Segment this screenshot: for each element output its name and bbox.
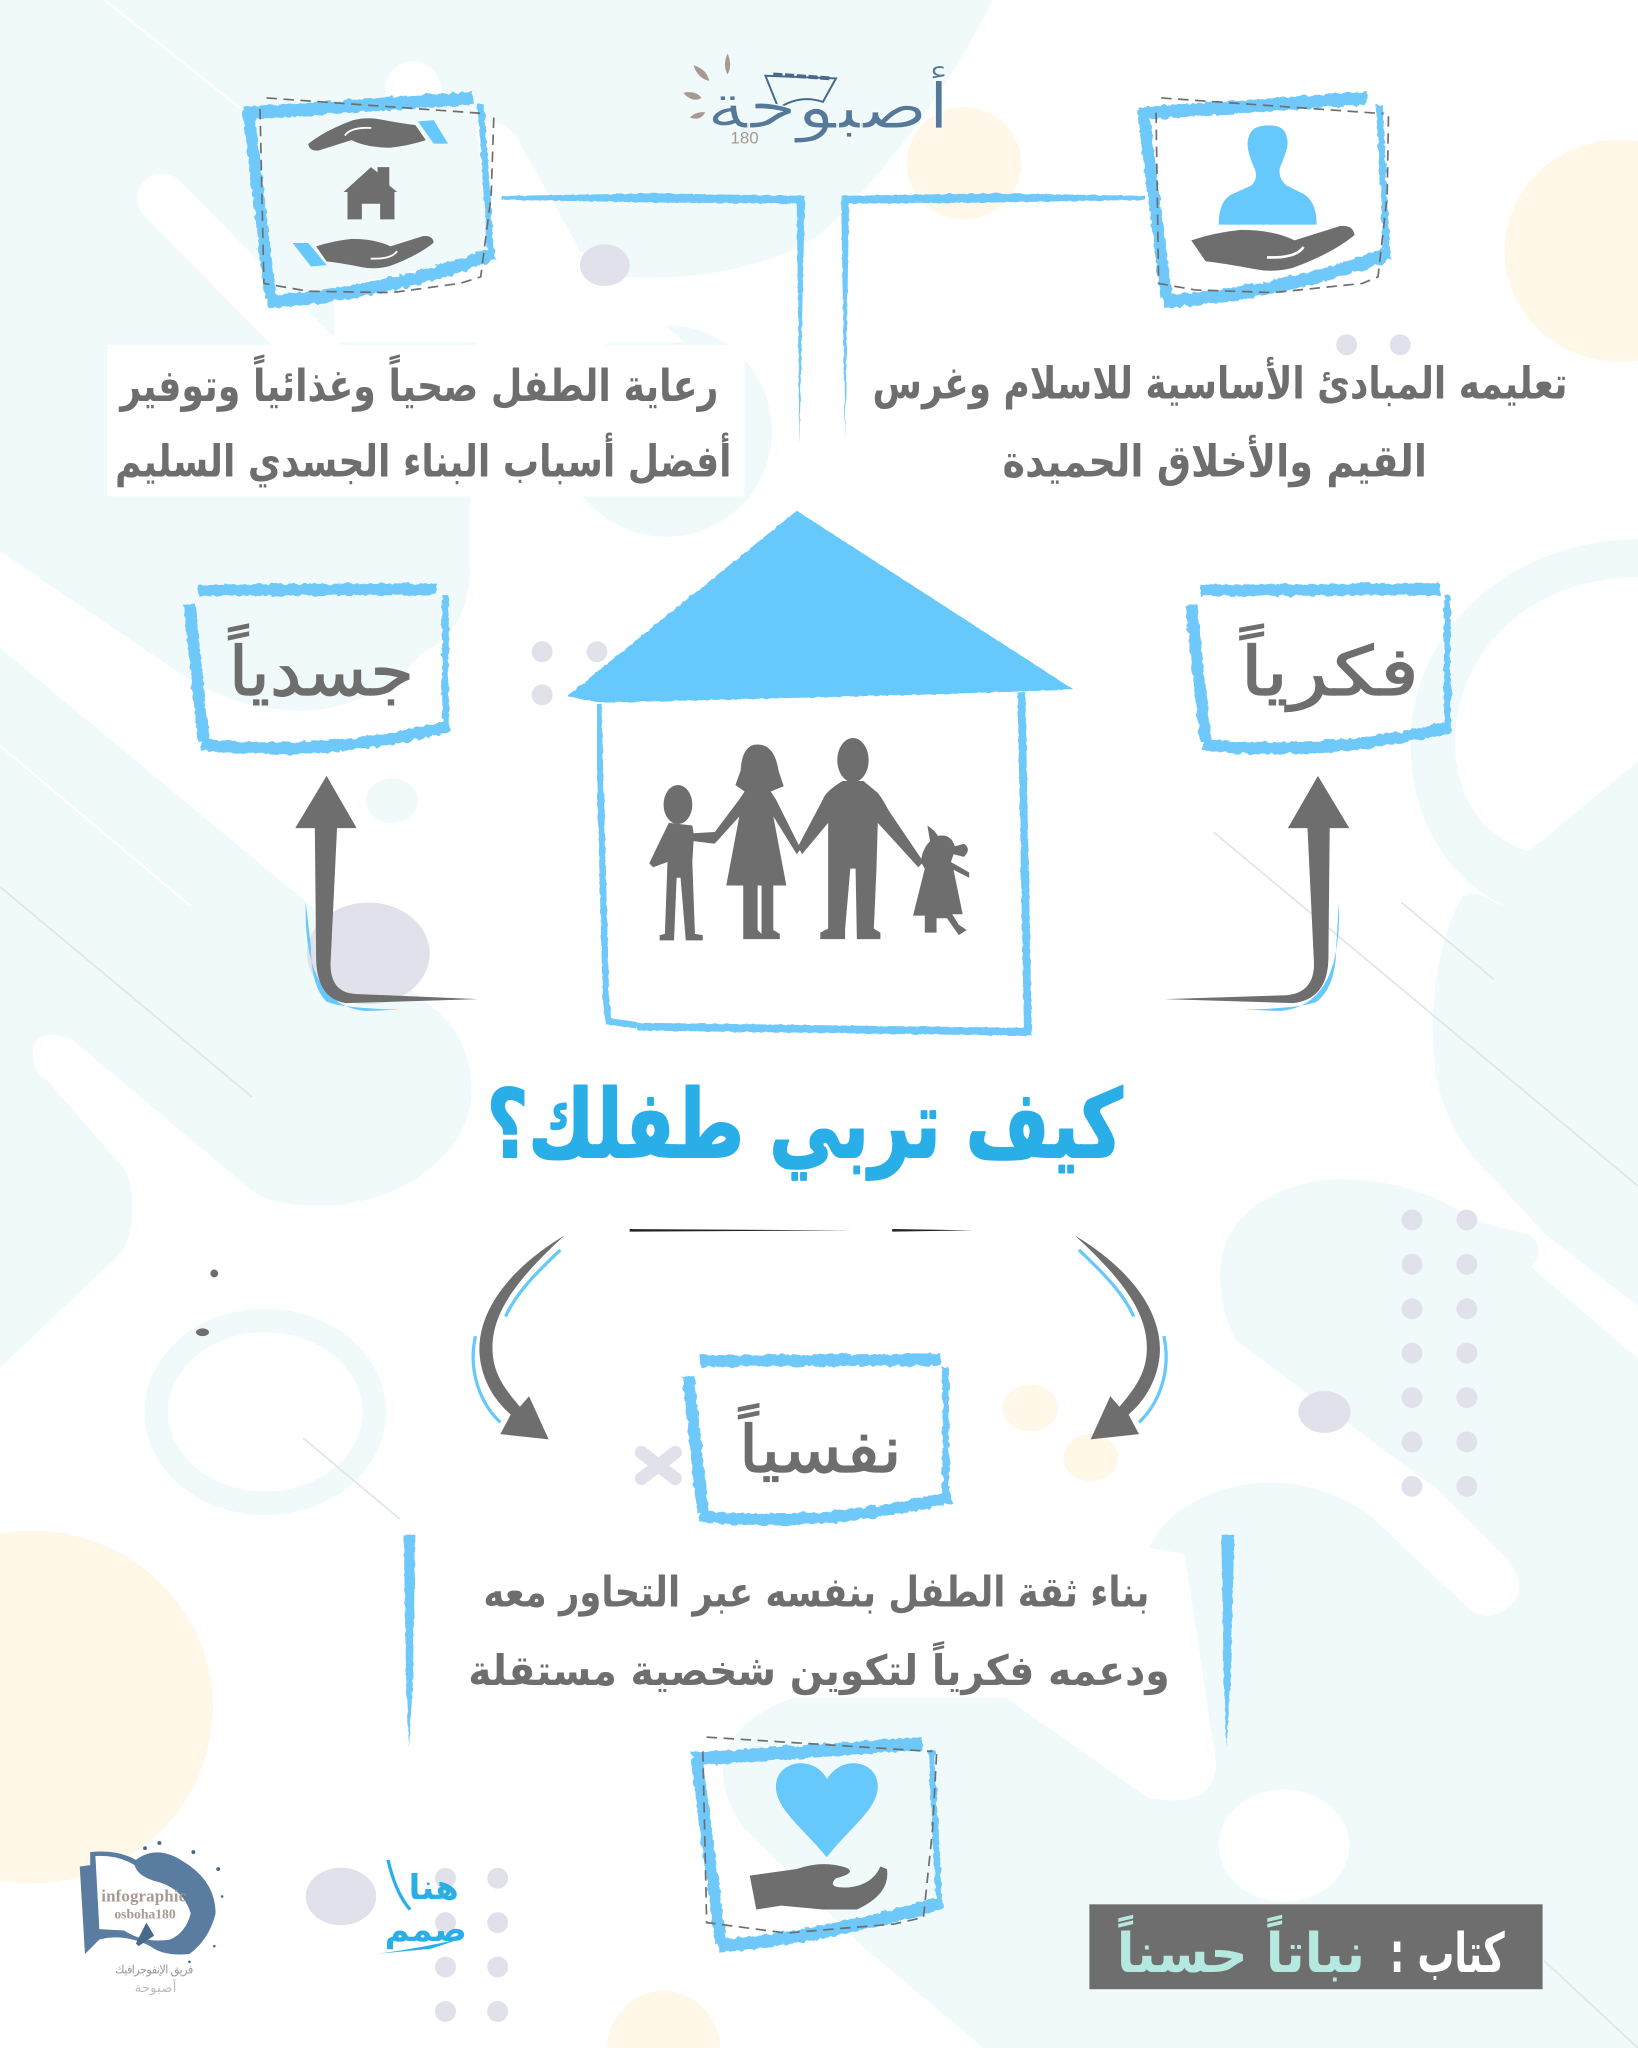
panel: emotionally label: نفسياً	[738, 1404, 902, 1488]
text block: physical description	[107, 345, 745, 496]
logo: Osboha 180: 180	[730, 129, 759, 148]
side bar right	[1221, 1535, 1234, 1748]
title underline	[630, 1229, 973, 1232]
arrow: house to intellectually	[1165, 776, 1349, 1011]
panel: intellectually label	[1191, 589, 1451, 748]
icon: house in hands	[293, 118, 448, 268]
title: كيف تربي طفلك؟	[487, 1071, 1123, 1180]
text block: intellectual description: القيم والأخلاق الحميدة	[1003, 434, 1427, 488]
connector: left frame to house	[502, 193, 805, 444]
arrow: house to physically	[295, 776, 478, 1011]
logo: designer signature	[376, 1860, 467, 1954]
connector: right frame to house	[841, 193, 1146, 438]
text block: emotional description: بناء ثقة الطفل بنفسه عبر التحاور معه	[483, 1568, 1149, 1618]
logo: infographic team: أصبوحة	[135, 1979, 176, 1996]
icon: family	[649, 738, 969, 940]
text block: physical description: أفضل أسباب البناء الجسدي السليم	[115, 433, 731, 488]
logo: infographic team: osboha180	[114, 1907, 176, 1922]
logo: Osboha 180: أصبوحة	[707, 65, 950, 143]
arrow: title to emotionally right	[1075, 1236, 1166, 1439]
logo: infographic team	[80, 1841, 223, 1996]
logo: designer signature: صمم	[385, 1910, 467, 1950]
logo: designer signature: هنا	[409, 1868, 459, 1908]
badge: book name	[1089, 1904, 1543, 1989]
badge: book name: نباتاً حسناً	[1117, 1914, 1365, 1985]
panel: heart frame	[692, 1737, 943, 1946]
text block: physical description: رعاية الطفل صحياً وغذائياً وتوفير	[119, 354, 718, 412]
text block: intellectual description	[873, 355, 1567, 488]
icon: heart on hand	[750, 1763, 887, 1910]
text block: emotional description	[425, 1554, 1185, 1698]
logo: Osboha 180	[683, 54, 950, 148]
logo: infographic team: infographic	[101, 1887, 187, 1906]
logo: infographic team: فريق الإنفوجرافيك	[115, 1963, 193, 1978]
panel: emotionally label	[688, 1360, 951, 1520]
panel: physically label: جسدياً	[228, 623, 414, 712]
arrow: title to emotionally left	[473, 1236, 564, 1439]
panel: physically label	[189, 589, 449, 748]
text block: emotional description: ودعمه فكرياً لتكوين شخصية مستقلة	[468, 1641, 1170, 1696]
panel: physical care frame	[244, 98, 494, 302]
badge: book name: كتاب :	[1390, 1921, 1505, 1985]
icon: person on hand	[1191, 125, 1355, 271]
panel: intellectual care frame	[1139, 98, 1390, 302]
house with family	[567, 511, 1074, 1036]
panel: intellectually label: فكرياً	[1240, 623, 1419, 712]
side bar left	[404, 1535, 415, 1748]
